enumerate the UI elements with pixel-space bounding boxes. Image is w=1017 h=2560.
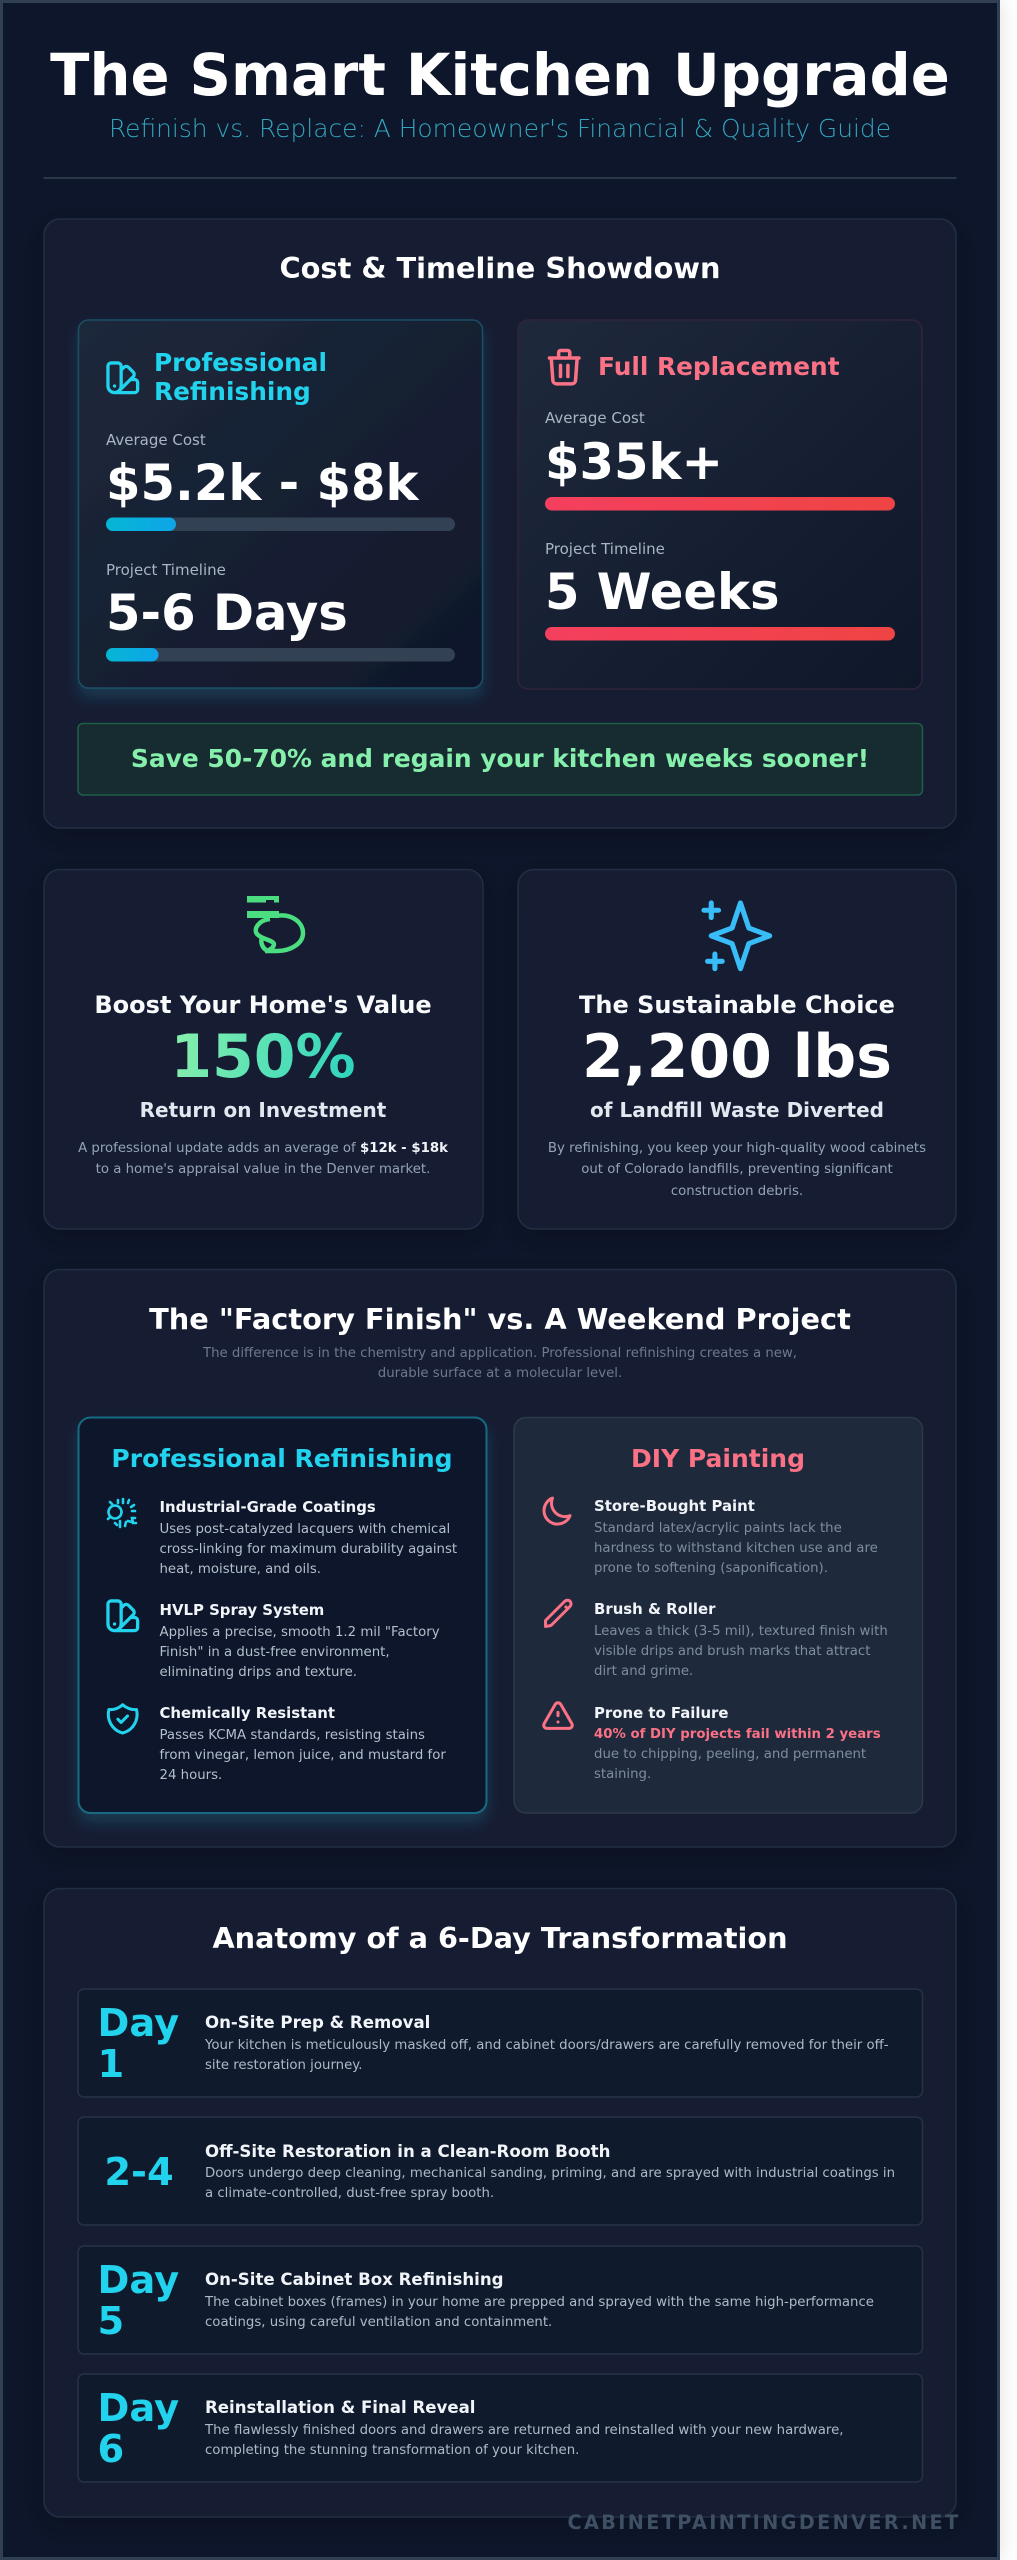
cost bar <box>106 518 455 531</box>
icon: shield <box>108 1705 137 1733</box>
step: day 5: coatings, using careful ventilation and containment. <box>205 2315 552 2330</box>
step: days 2-4: a climate-controlled, dust-free spray booth. <box>205 2186 494 2201</box>
step: day 6: Reinstallation & Final Reveal <box>205 2398 475 2417</box>
item title: Brush & Roller <box>594 1600 716 1618</box>
cost bar <box>545 497 895 510</box>
step: day 6: completing the stunning transformation of your kitchen. <box>205 2443 579 2458</box>
description: A professional update adds an average of $12k - $18k <box>78 1141 448 1156</box>
item: brush <box>546 1600 888 1679</box>
item text: Uses post-catalyzed lacquers with chemical <box>160 1522 450 1537</box>
item title: Store-Bought Paint <box>594 1497 755 1515</box>
timeline label: Project Timeline <box>106 561 226 579</box>
description: By refinishing, you keep your high-quality wood cabinets <box>548 1141 926 1156</box>
card heading: DIY Painting <box>631 1444 805 1473</box>
cost label: Average Cost <box>545 409 645 427</box>
step: day 6: 6 <box>98 2427 124 2472</box>
step: day 1: 1 <box>98 2042 124 2087</box>
timeline label: Project Timeline <box>545 540 665 558</box>
step: day 1: Day <box>98 2001 179 2046</box>
stat label: of Landfill Waste Diverted <box>590 1098 884 1122</box>
step: day 1: On-Site Prep & Removal <box>205 2013 430 2032</box>
item text: Standard latex/acrylic paints lack the <box>594 1521 842 1536</box>
heading: Boost Your Home's Value <box>94 991 432 1019</box>
item text: due to chipping, peeling, and permanent <box>594 1747 866 1762</box>
icon: moon <box>544 1498 570 1524</box>
card heading: Full Replacement <box>598 352 840 381</box>
panel: cost and timeline <box>44 219 956 828</box>
item: hvlp <box>108 1601 440 1680</box>
step: day 5: The cabinet boxes (frames) in your home are prepped and sprayed with the same high-performance <box>204 2295 874 2310</box>
step: day 6 <box>78 2374 922 2482</box>
icon: sparkles <box>704 903 770 969</box>
panel: home value <box>44 870 483 1229</box>
subtitle: Refinish vs. Replace: A Homeowner's Financial & Quality Guide <box>109 114 891 143</box>
step: day 1: Your kitchen is meticulously masked off, and cabinet doors/drawers are carefully removed for their off- <box>204 2038 889 2053</box>
card heading: Professional <box>154 348 327 377</box>
item: paint <box>544 1497 878 1576</box>
step: day 1: site restoration journey. <box>205 2058 362 2073</box>
item highlight: 40% of DIY projects fail within 2 years <box>594 1727 881 1742</box>
step: day 5: 5 <box>98 2299 124 2344</box>
panel: sustainability <box>518 870 956 1229</box>
item title: Chemically Resistant <box>160 1704 335 1722</box>
step: days 2-4: Off-Site Restoration in a Clean-Room Booth <box>205 2142 610 2161</box>
item text: staining. <box>594 1767 651 1782</box>
step: day 5: Day <box>98 2258 179 2303</box>
icon: swatch <box>108 1601 138 1631</box>
watermark: CABINETPAINTINGDENVER.NET <box>568 2511 961 2534</box>
intro: durable surface at a molecular level. <box>378 1366 622 1381</box>
item title: HVLP Spray System <box>160 1601 324 1619</box>
item text: Leaves a thick (3-5 mil), textured finish with <box>594 1624 888 1639</box>
step: day 6: Day <box>98 2386 179 2431</box>
cost value: $35k+ <box>545 433 723 491</box>
icon: swatch <box>108 363 138 393</box>
item text: Passes KCMA standards, resisting stains <box>160 1728 425 1743</box>
heading: The "Factory Finish" vs. A Weekend Project <box>149 1302 851 1336</box>
item text: visible drips and brush marks that attract <box>594 1644 870 1659</box>
item: failure <box>544 1703 881 1782</box>
panel: factory finish comparison <box>44 1270 956 1847</box>
timeline value: 5 Weeks <box>545 563 779 621</box>
header <box>50 42 950 143</box>
stat: 2,200 lbs <box>582 1022 892 1092</box>
timeline bar <box>545 627 895 640</box>
card heading: Refinishing <box>154 377 311 406</box>
item text: eliminating drips and texture. <box>160 1665 357 1680</box>
intro: The difference is in the chemistry and application. Professional refinishing creates a new, <box>202 1346 797 1361</box>
stat label: Return on Investment <box>140 1098 387 1122</box>
item text: heat, moisture, and oils. <box>160 1562 321 1577</box>
card: full replacement <box>518 320 922 689</box>
card: diy <box>514 1418 922 1813</box>
item text: from vinegar, lemon juice, and mustard for <box>160 1748 446 1763</box>
step: day 5 <box>78 2246 922 2354</box>
item text: 24 hours. <box>160 1768 222 1783</box>
timeline value: 5-6 Days <box>106 584 348 642</box>
panel: timeline <box>44 1888 956 2517</box>
timeline bar <box>106 648 455 662</box>
item text: cross-linking for maximum durability against <box>160 1542 457 1557</box>
cost label: Average Cost <box>106 431 206 449</box>
description: out of Colorado landfills, preventing significant <box>581 1162 893 1177</box>
description: construction debris. <box>671 1184 803 1199</box>
icon: coating burst <box>108 1499 136 1527</box>
item title: Industrial-Grade Coatings <box>160 1498 376 1516</box>
title: The Smart Kitchen Upgrade <box>50 42 950 109</box>
icon: dollar <box>247 896 303 951</box>
item title: Prone to Failure <box>594 1704 729 1722</box>
icon: warning <box>544 1703 572 1728</box>
heading: Cost & Timeline Showdown <box>280 251 720 285</box>
savings callout: Save 50-70% and regain your kitchen weeks sooner! <box>131 744 869 773</box>
savings callout <box>78 724 922 795</box>
heading: The Sustainable Choice <box>579 991 895 1019</box>
step: days 2-4: 2-4 <box>104 2150 174 2195</box>
step: day 1 <box>78 1989 922 2097</box>
icon: trash <box>549 351 579 384</box>
item text: dirt and grime. <box>594 1664 693 1679</box>
icon: pencil <box>546 1600 571 1626</box>
item: chemical <box>108 1704 446 1783</box>
item: coatings <box>108 1498 457 1577</box>
card: professional refinishing <box>78 320 482 688</box>
step: days 2-4 <box>78 2117 922 2225</box>
step: days 2-4: Doors undergo deep cleaning, mechanical sanding, priming, and are sprayed with industrial coatings in <box>205 2166 895 2181</box>
cost value: $5.2k - $8k <box>106 454 419 512</box>
card: professional <box>78 1418 486 1813</box>
heading: Anatomy of a 6-Day Transformation <box>212 1921 788 1955</box>
description: to a home's appraisal value in the Denver market. <box>96 1162 430 1177</box>
step: day 5: On-Site Cabinet Box Refinishing <box>205 2270 504 2289</box>
step: day 6: The flawlessly finished doors and drawers are returned and reinstalled with your new hardware, <box>204 2423 844 2438</box>
item text: Finish" in a dust-free environment, <box>160 1645 390 1660</box>
stat: 150% <box>170 1022 356 1092</box>
item text: hardness to withstand kitchen use and are <box>594 1541 878 1556</box>
item text: Applies a precise, smooth 1.2 mil "Factory <box>160 1625 440 1640</box>
card heading: Professional Refinishing <box>111 1444 453 1473</box>
item text: prone to softening (saponification). <box>594 1561 828 1576</box>
